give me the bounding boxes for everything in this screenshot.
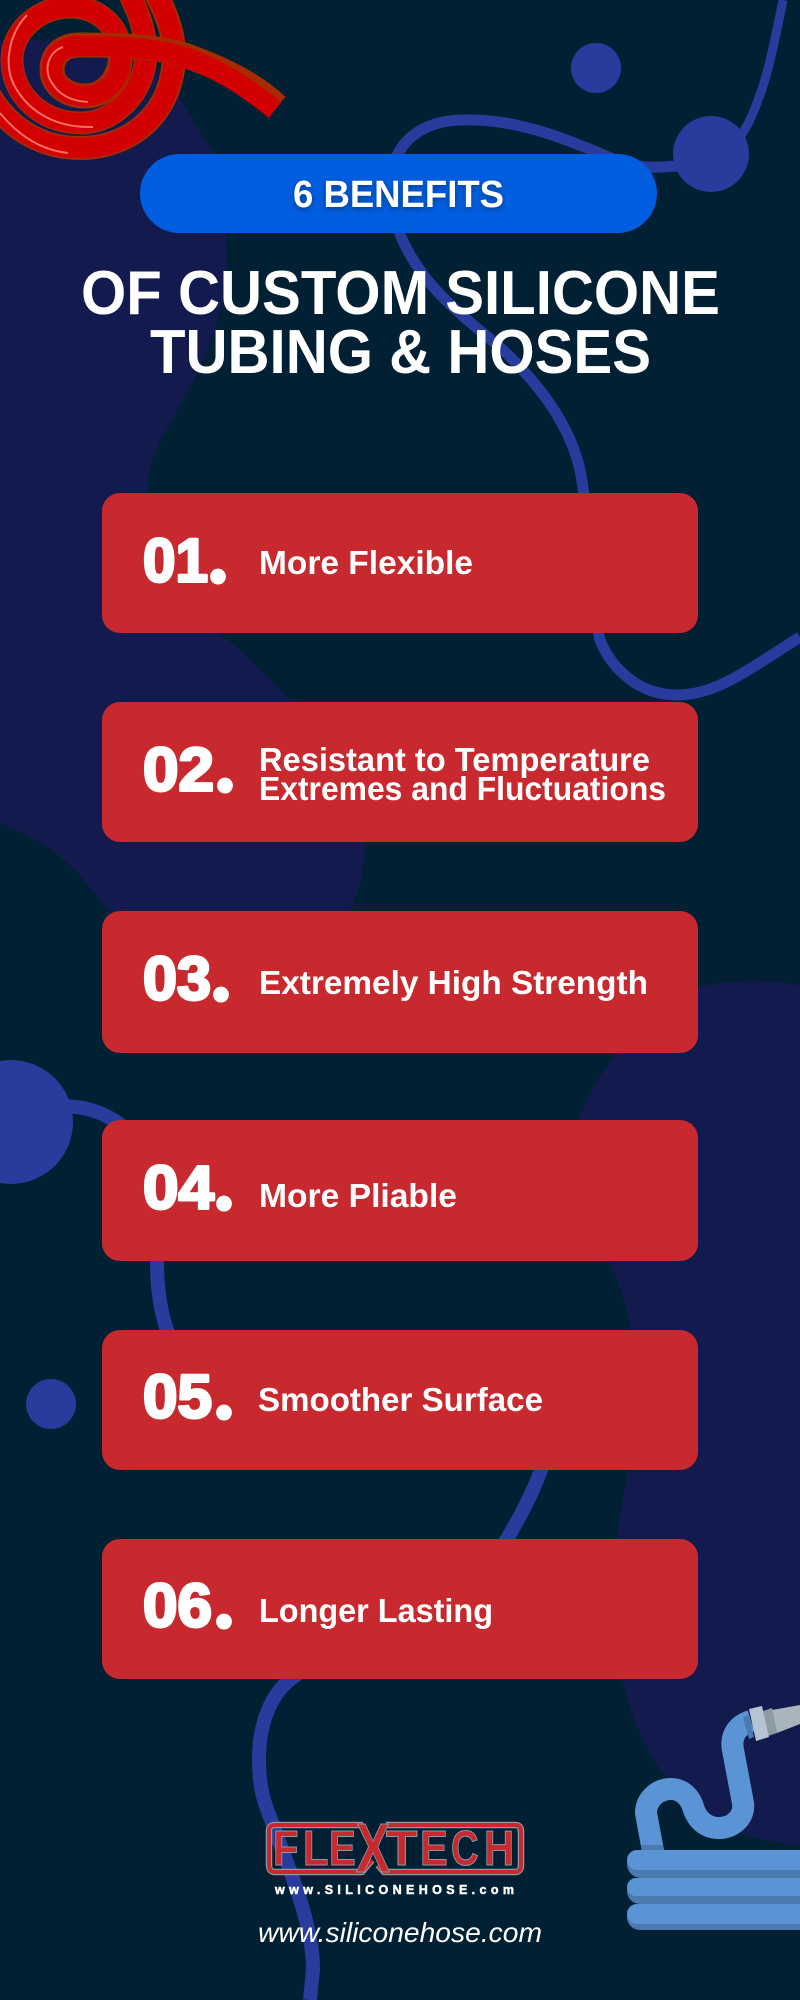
number 05 bbox=[143, 1333, 236, 1440]
number 04 bbox=[143, 1124, 236, 1231]
logo wordmark: F bbox=[273, 1821, 298, 1876]
logo wordmark: C bbox=[451, 1822, 479, 1876]
number 03 bbox=[143, 915, 233, 1022]
number 03: 03 bbox=[143, 944, 211, 1012]
card 6 bbox=[102, 1539, 698, 1679]
label bbox=[259, 741, 666, 807]
logo subtitle: www.SILICONEHOSE.com bbox=[274, 1883, 514, 1897]
card 2 bbox=[102, 702, 698, 842]
label: More Flexible bbox=[259, 544, 473, 581]
nozzle body bbox=[772, 1705, 800, 1733]
title: OF CUSTOM SILICONE bbox=[81, 259, 720, 328]
label: More Pliable bbox=[259, 1177, 457, 1214]
logo wordmark: T bbox=[386, 1821, 418, 1876]
logo wordmark: L bbox=[303, 1821, 328, 1876]
icon: red coiled tubing bbox=[0, 0, 277, 153]
number 02 bbox=[143, 706, 237, 813]
icon: blue garden hose with nozzle bbox=[627, 1705, 800, 1930]
number 01: . bbox=[206, 497, 230, 604]
number 01: 01 bbox=[143, 526, 208, 594]
number 02: . bbox=[213, 706, 237, 813]
hose body bbox=[646, 1721, 751, 1851]
nozzle connector bbox=[749, 1706, 769, 1741]
number 04: 04 bbox=[143, 1154, 214, 1222]
logo: Flextech bbox=[269, 1809, 521, 1897]
decoration: lower left tube and circles bbox=[0, 1060, 543, 2000]
card 4 bbox=[102, 1120, 698, 1261]
label: Longer Lasting bbox=[259, 1592, 493, 1629]
number 05: . bbox=[212, 1333, 236, 1440]
website url: www.siliconehose.com bbox=[258, 1917, 542, 1948]
coil band 2 bbox=[627, 1878, 800, 1904]
label: Extremely High Strength bbox=[259, 964, 648, 1001]
label: Smoother Surface bbox=[258, 1381, 543, 1418]
nozzle collar bbox=[743, 1715, 754, 1739]
number 06: 06 bbox=[143, 1572, 212, 1640]
card 5 bbox=[102, 1330, 698, 1470]
number 03: . bbox=[209, 915, 233, 1022]
number 01 bbox=[143, 497, 230, 604]
number 06: . bbox=[212, 1542, 236, 1649]
title bbox=[81, 259, 720, 387]
coil band 3 bbox=[627, 1904, 800, 1930]
number 04: . bbox=[212, 1124, 236, 1231]
blob: left navy shape bbox=[0, 40, 365, 1000]
card 1 bbox=[102, 493, 698, 633]
logo wordmark: H bbox=[484, 1821, 514, 1876]
heading pill bbox=[140, 154, 657, 233]
logo wordmark: E bbox=[420, 1821, 448, 1876]
logo frame bbox=[269, 1825, 521, 1872]
logo wordmark bbox=[273, 1809, 514, 1887]
label: Extremes and Fluctuations bbox=[259, 770, 666, 807]
card 3 bbox=[102, 911, 698, 1053]
label: Resistant to Temperature bbox=[259, 741, 650, 778]
number 05: 05 bbox=[143, 1362, 212, 1430]
hose collars bbox=[641, 1845, 665, 1851]
number 02: 02 bbox=[143, 736, 214, 804]
nozzle band bbox=[763, 1708, 777, 1736]
decoration: top right tube and circles bbox=[390, 0, 800, 695]
coil band 1 bbox=[627, 1850, 800, 1878]
logo wordmark: E bbox=[329, 1821, 356, 1876]
number 06 bbox=[143, 1542, 236, 1649]
logo wordmark: X bbox=[356, 1809, 390, 1887]
pill text: 6 BENEFITS bbox=[293, 174, 504, 216]
blob: right navy shape bbox=[576, 981, 800, 1845]
title: TUBING & HOSES bbox=[150, 318, 651, 387]
